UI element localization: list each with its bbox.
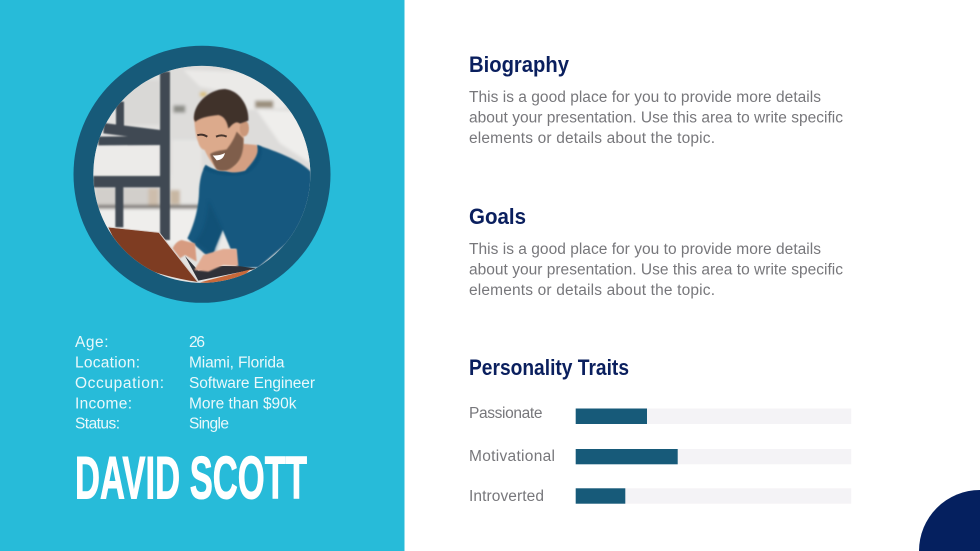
- section: personality traits: [469, 355, 851, 505]
- details: age, location, occupation, income, status: Income:: [75, 396, 132, 412]
- heading: biography: Biography: [469, 52, 570, 77]
- name: DAVID SCOTT: [75, 444, 307, 512]
- details: age, location, occupation, income, status: [75, 334, 315, 433]
- laptop: [185, 256, 257, 281]
- heading: personality traits: Personality Traits: [469, 355, 629, 380]
- details: age, location, occupation, income, status: Occupation:: [75, 375, 164, 392]
- details: age, location, occupation, income, status: Miami, Florida: [189, 354, 285, 372]
- details: age, location, occupation, income, status: Software Engineer: [189, 375, 315, 392]
- goals text: This is a good place for you to provide more details: [469, 241, 821, 258]
- corner quarter circle: [919, 490, 980, 551]
- details: age, location, occupation, income, status: Single: [189, 416, 229, 433]
- details: age, location, occupation, income, status: Location:: [75, 354, 140, 372]
- biography text: elements or details about the topic.: [469, 130, 715, 147]
- trait bar: motivational: Motivational: [469, 448, 555, 465]
- trait bar: introverted: Introverted: [469, 488, 544, 505]
- sweater: [187, 145, 312, 268]
- heading: goals: Goals: [469, 204, 526, 229]
- trait bar: motivational: [469, 448, 851, 465]
- panel: profile: [0, 0, 404, 551]
- photo: man smiling at a laptop: [90, 63, 317, 287]
- trait bar: passionate: Passionate: [469, 405, 542, 422]
- biography text: [469, 89, 843, 147]
- details: age, location, occupation, income, status: More than $90k: [189, 396, 297, 412]
- goals text: elements or details about the topic.: [469, 282, 715, 299]
- details: age, location, occupation, income, status: Status:: [75, 416, 120, 433]
- section: goals: [469, 204, 843, 299]
- details: age, location, occupation, income, status: Age:: [75, 334, 108, 351]
- goals text: about your presentation. Use this area to write specific: [469, 262, 843, 278]
- section: biography: [469, 52, 843, 147]
- biography text: about your presentation. Use this area to write specific: [469, 110, 843, 126]
- goals text: [469, 241, 843, 299]
- hands: [173, 240, 197, 262]
- details: age, location, occupation, income, status: 26: [189, 334, 205, 351]
- biography text: This is a good place for you to provide more details: [469, 89, 821, 106]
- trait bar: passionate: [469, 405, 851, 424]
- neck and head: [225, 143, 258, 172]
- trait bar: introverted: [469, 488, 851, 505]
- avatar ring: [74, 46, 330, 303]
